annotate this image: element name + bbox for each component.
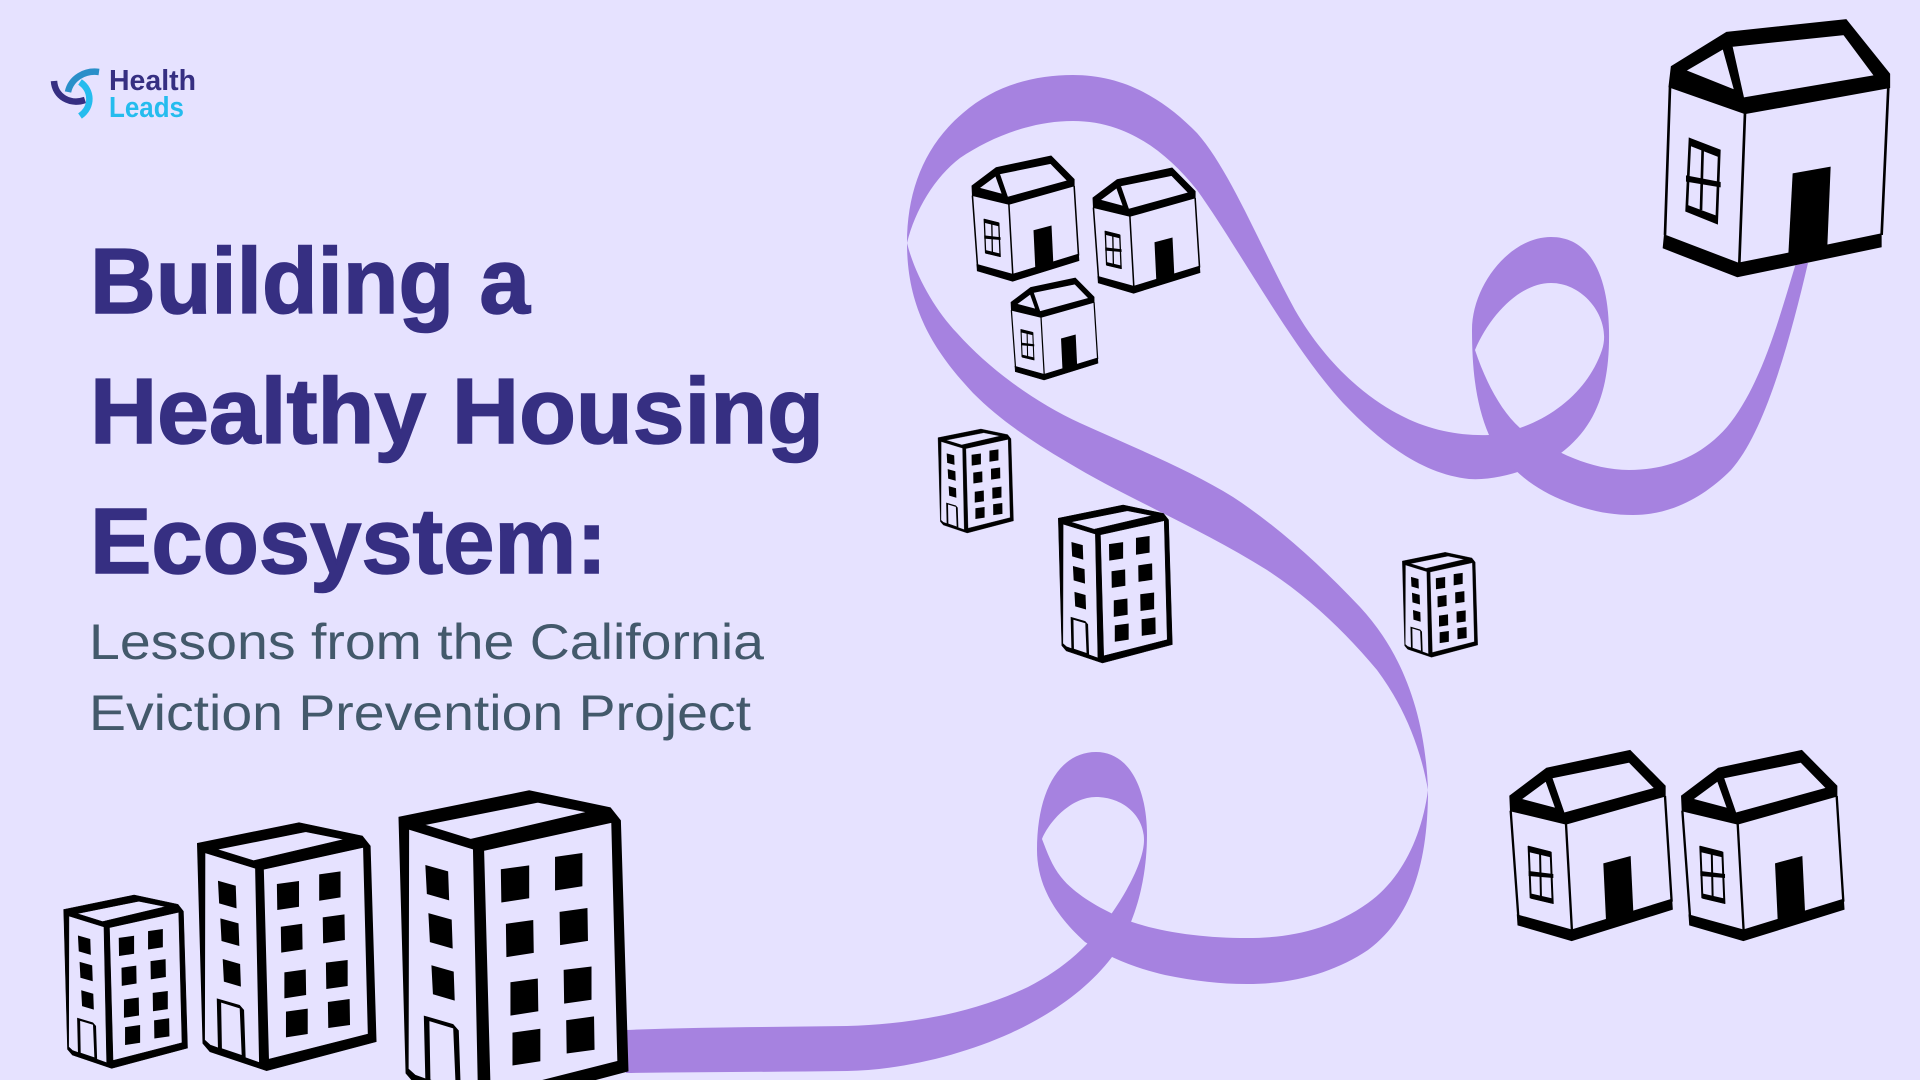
icon: small apartment building, bottom left [64, 895, 188, 1068]
logo: Health Leads [54, 65, 196, 124]
subtitle: Eviction Prevention Project [89, 685, 751, 741]
logo wordmark [109, 65, 196, 124]
subtitle: Lessons from the California [89, 614, 764, 670]
icon: house, bottom right second [1682, 751, 1844, 941]
logo wordmark: Health [109, 65, 196, 97]
purple ribbon path connecting buildings and houses [626, 75, 1808, 1073]
icon: house cluster, left house [972, 156, 1079, 281]
title: Healthy Housing [90, 359, 824, 463]
icon: house, bottom right first [1510, 751, 1672, 941]
icon: large apartment building, bottom left [399, 791, 628, 1080]
title: Ecosystem: [90, 489, 607, 593]
icon: house cluster, lower house [1011, 278, 1098, 380]
title: Building a [90, 229, 531, 333]
logo wordmark: Leads [109, 92, 184, 124]
icon: medium apartment building, centre [1058, 505, 1172, 663]
icon: medium apartment building, bottom left [197, 823, 376, 1071]
logo icon: swirl [54, 72, 99, 116]
subtitle [89, 614, 764, 741]
icon: house cluster, right house [1093, 168, 1200, 293]
title [90, 229, 824, 593]
icon: small apartment building, centre left [938, 429, 1013, 533]
icon: small apartment building, right [1402, 552, 1478, 657]
icon: large house, top right [1663, 20, 1889, 277]
